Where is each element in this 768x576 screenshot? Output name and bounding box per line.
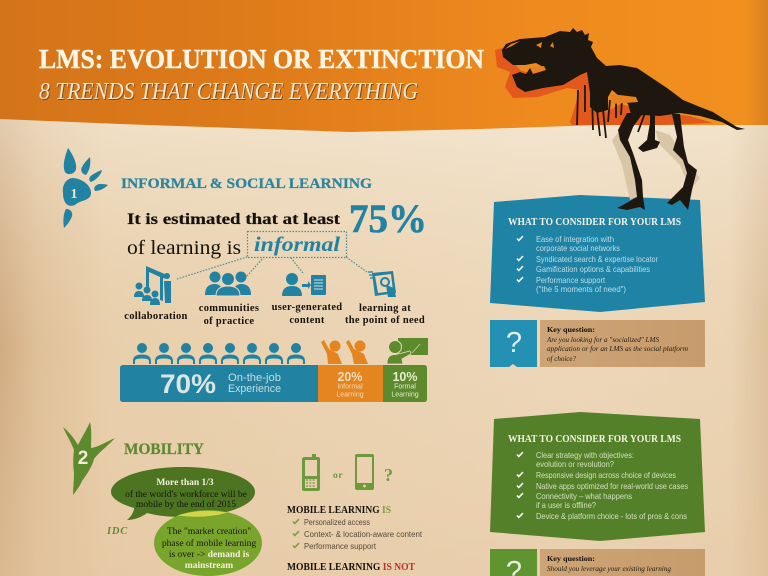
label: communities of practice: communities <box>199 303 259 314</box>
dinosaur middle leg <box>638 114 660 152</box>
bubble text: market creation: is over -> demand is <box>169 550 249 560</box>
section 1 heading: INFORMAL & SOCIAL LEARNING <box>121 176 372 192</box>
icon: user-generated content <box>282 273 326 296</box>
section 2 heading: MOBILITY <box>124 441 204 458</box>
checklist: Syndicated search & expertise locator <box>536 254 658 264</box>
source label: IDC: IDC <box>106 526 128 537</box>
bubble text: workforce: mobile by the end of 2015 <box>136 499 236 510</box>
icon: smartphone <box>355 454 374 490</box>
checklist: Gamification options & capabilities <box>536 264 650 274</box>
panel heading: WHAT TO CONSIDER FOR YOUR LMS <box>508 216 681 228</box>
section 2 paw icon <box>63 422 115 495</box>
dinosaur orange shadow <box>495 48 713 125</box>
section 2 number: 2 <box>78 448 88 469</box>
section 1 paw icon <box>63 148 108 228</box>
key question label: Key question: <box>547 325 595 334</box>
bubble text: market creation <box>162 527 256 571</box>
bubble text: workforce: of the world's workforce will be <box>125 490 247 500</box>
icon: collaboration <box>134 266 171 305</box>
list checks <box>292 519 300 549</box>
statement line two: of learning is <box>127 237 241 259</box>
statement line one: It is estimated that at least <box>127 211 341 228</box>
label: learning at the point of need: learning at <box>359 303 411 314</box>
list: mobile learning is <box>287 504 423 551</box>
list items: Performance support <box>304 541 377 551</box>
label on-the-job: On-the-job <box>228 372 281 384</box>
checklist: Device & platform choice - lots of pros & cons <box>536 511 687 521</box>
stacked bar: learning mix <box>120 365 427 402</box>
key question body: Are you looking for a "socialized" LMS <box>546 335 659 344</box>
segment: 70 percent <box>120 365 318 402</box>
informal word: informal <box>254 232 340 256</box>
label formal learning: Formal <box>394 384 416 390</box>
label: learning at the point of need: the point of need <box>345 315 425 326</box>
value 10%: 10% <box>392 370 418 384</box>
value 70%: 70% <box>160 369 216 399</box>
label: communities of practice: of practice <box>204 316 254 327</box>
key question body: application or for an LMS as the social platform <box>547 344 689 353</box>
dotted connector lines <box>177 257 367 279</box>
dark bubble <box>111 467 255 520</box>
key question label: Key question: <box>547 554 595 563</box>
icon: feature phone <box>302 454 320 491</box>
subtitle: 8 TRENDS THAT CHANGE EVERYTHING <box>39 79 418 105</box>
list items <box>304 517 423 551</box>
checklist <box>536 450 688 521</box>
orange header band <box>0 0 768 132</box>
dinosaur paper shadow <box>612 130 700 200</box>
panel: what to consider, green <box>490 412 705 541</box>
text: or: or <box>333 471 343 481</box>
label: user-generated content: user-generated <box>272 302 342 313</box>
75 percent: 75% <box>349 196 427 241</box>
segment: 20 percent <box>318 365 383 402</box>
speech bubbles <box>111 467 262 576</box>
dinosaur rib gap <box>611 94 638 104</box>
bubble text: market creation: mainstream <box>185 561 233 571</box>
check marks <box>516 452 524 519</box>
checklist: corporate social networks <box>536 243 620 253</box>
bubble overlap <box>177 511 228 517</box>
label informal learning: Informal <box>337 384 363 390</box>
checklist: Clear strategy with objectives: <box>536 450 634 460</box>
light bubble <box>154 510 262 576</box>
key question body: Should you leverage your existing learning <box>547 564 671 573</box>
segment: 10 percent <box>383 365 427 402</box>
label experience: Experience <box>228 383 281 395</box>
dinosaur skull openings <box>505 41 554 74</box>
statistic: 75% informal <box>127 196 427 259</box>
key question square, green <box>490 549 537 576</box>
icon: communities <box>205 272 251 296</box>
checklist: Responsive design across choice of devices <box>536 470 676 480</box>
checklist: Connectivity – what happens <box>536 491 632 501</box>
icon: learning at point of need <box>368 271 396 297</box>
title: LMS: EVOLUTION OR EXTINCTION <box>39 44 484 74</box>
question mark: ? <box>506 327 522 359</box>
label: collaboration: collaboration <box>124 311 188 322</box>
checklist: evolution or revolution? <box>536 459 614 469</box>
list items: Personalized access <box>304 517 370 527</box>
heading: mobile learning is not: MOBILE LEARNING IS NOT <box>287 561 416 573</box>
bubble text: more than 1/3: More than 1/3 <box>156 478 214 488</box>
checklist: Ease of integration with <box>536 234 614 244</box>
checklist: if a user is offline? <box>536 500 596 510</box>
panel: what to consider, blue <box>490 195 705 312</box>
checklist: ("the 5 moments of need") <box>536 284 626 294</box>
key question body: of choice? <box>547 354 576 363</box>
bubble text: market creation: The "market creation" <box>167 527 251 537</box>
dinosaur skull and body <box>502 28 745 130</box>
label: user-generated content: content <box>289 315 325 326</box>
check marks <box>516 236 524 283</box>
dinosaur right leg <box>667 114 697 210</box>
icon labels <box>124 302 425 327</box>
checklist: Native apps optimized for real-world use cases <box>536 481 688 491</box>
value 20%: 20% <box>337 370 363 384</box>
dinosaur ribs and fringe <box>577 85 645 138</box>
people row: on-the-job <box>133 343 305 364</box>
bubble text: market creation: phase of mobile learning <box>162 538 256 549</box>
key question text, green <box>540 549 705 576</box>
panel heading: WHAT TO CONSIDER FOR YOUR LMS <box>508 433 681 445</box>
checklist: Performance support <box>536 275 606 285</box>
illustration: T-rex skeleton <box>495 28 745 210</box>
label informal learning: Learning <box>336 392 364 398</box>
key question body <box>546 335 689 363</box>
text: question mark: ? <box>384 465 393 485</box>
label formal learning: Learning <box>391 392 419 398</box>
people: informal learners <box>321 340 368 364</box>
informal box <box>248 232 346 258</box>
list heading: MOBILE LEARNING IS <box>287 504 391 516</box>
person: teacher at board <box>387 338 428 364</box>
dinosaur left leg <box>617 113 645 210</box>
section 1 number: 1 <box>70 187 78 202</box>
checklist <box>536 234 658 294</box>
list items: Context- & location-aware content <box>304 529 423 539</box>
key question square, blue <box>490 320 537 367</box>
key question text, blue <box>540 320 705 367</box>
